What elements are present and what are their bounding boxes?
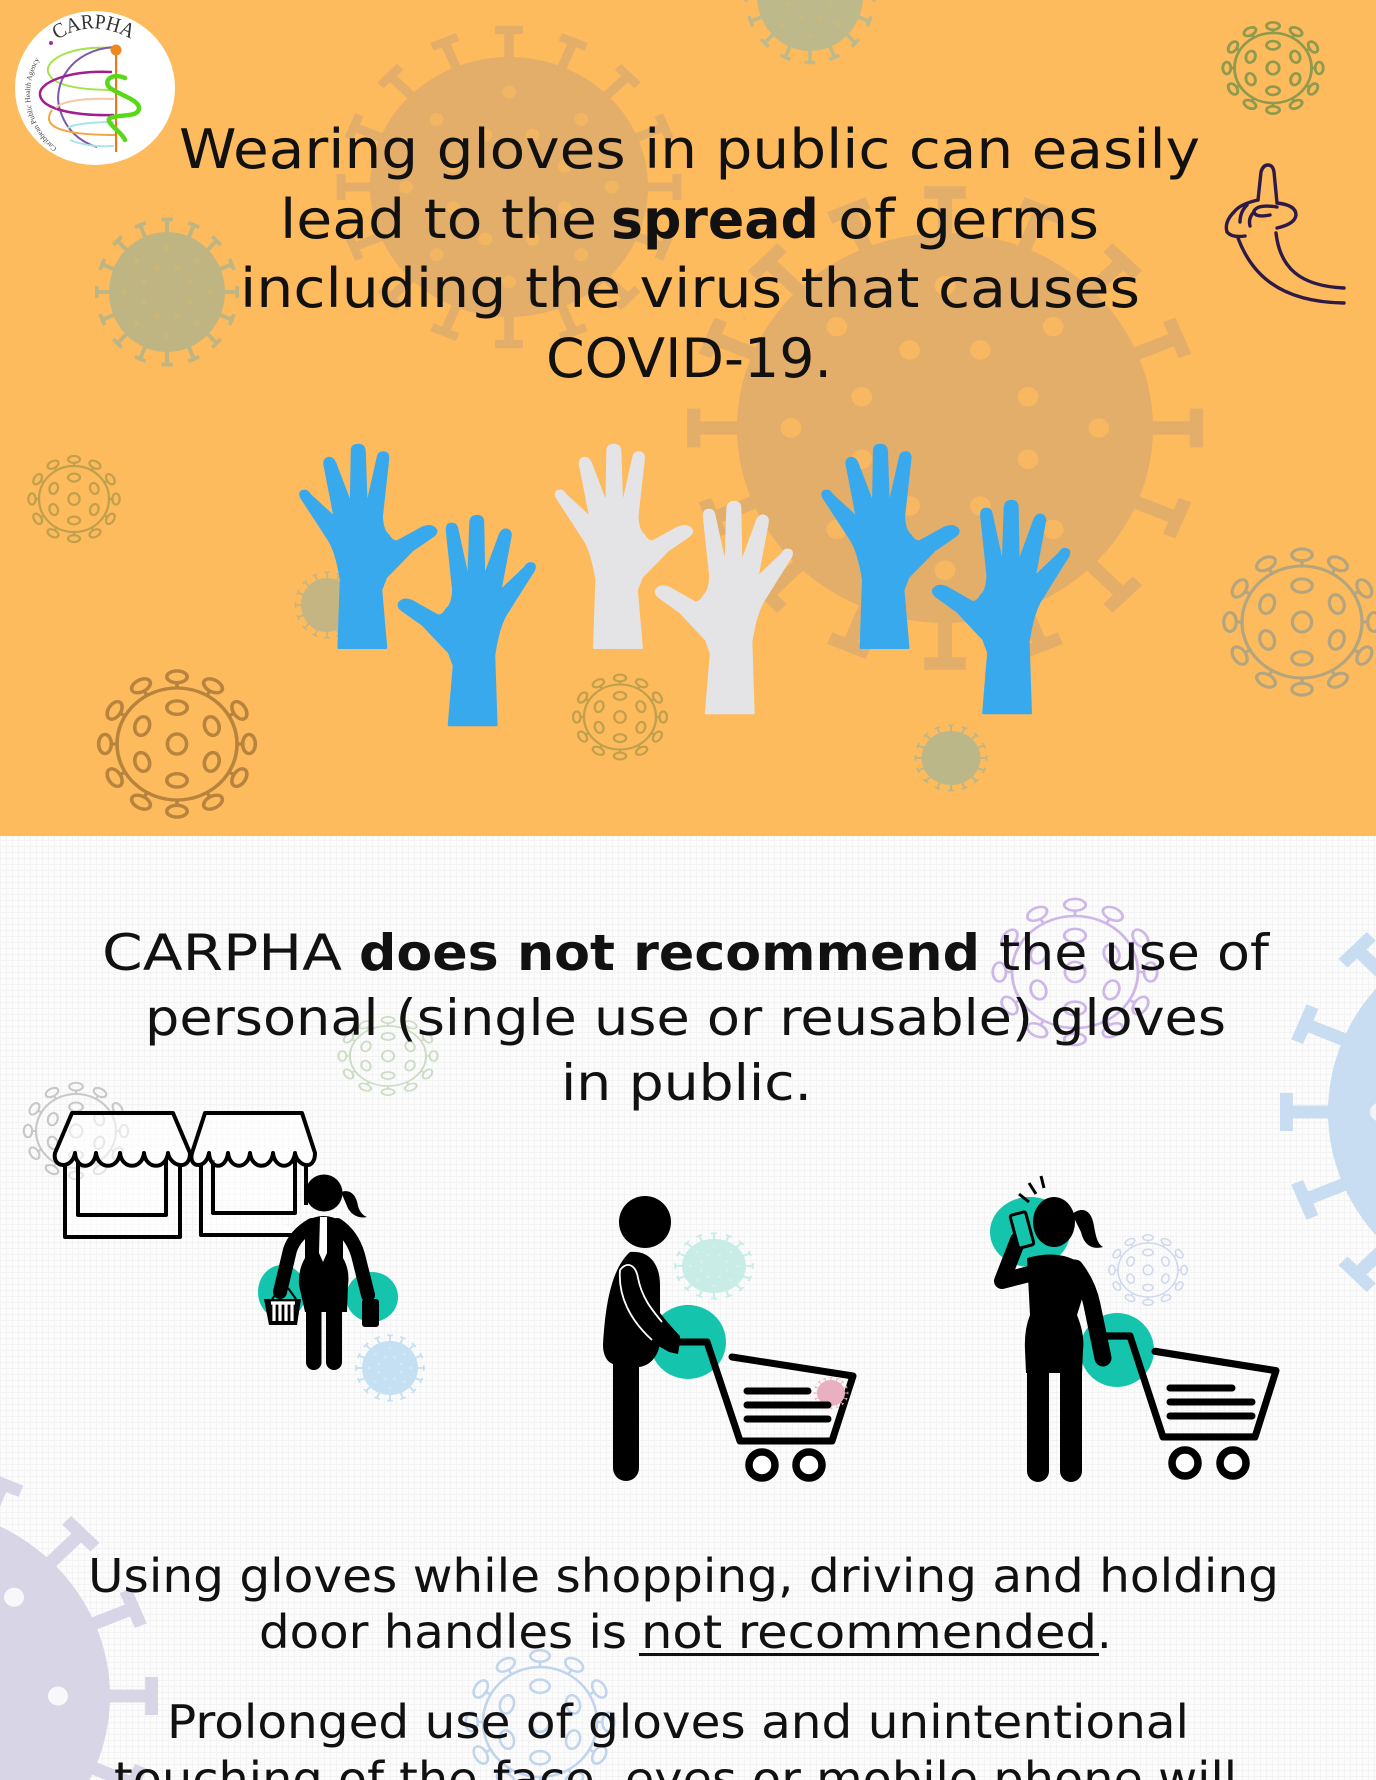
icon: large lavender virus bottom left — [0, 1460, 158, 1780]
text: using gloves not recommended — [88, 1549, 1279, 1659]
text: CARPHA recommendation: personal (single use or reusable) gloves — [145, 989, 1226, 1047]
heading: wearing gloves: of germs — [838, 188, 1099, 251]
heading: wearing gloves: Wearing gloves in public can easily — [179, 118, 1200, 181]
icon: large tan virus centre right — [687, 186, 1203, 670]
heading: wearing gloves: spread — [611, 188, 819, 251]
icon: outline grey virus — [24, 1083, 128, 1179]
heading: wearing gloves: COVID-19. — [546, 327, 832, 390]
illustration: raised gloved hands — [300, 445, 1069, 725]
icon: woman with basket and bag — [258, 1174, 398, 1370]
icon: sage virus bottom — [914, 725, 988, 791]
text: using gloves not recommended: Using gloves while shopping, driving and holding — [88, 1549, 1279, 1603]
icon: man with shopping cart — [603, 1196, 853, 1481]
icon: outline periwinkle virus — [1109, 1235, 1187, 1305]
icon: large blue virus right — [1280, 876, 1376, 1348]
icon: sage virus behind hand — [295, 572, 359, 638]
icon: white glove 2 — [656, 502, 792, 713]
icon: outline sage virus — [338, 1017, 438, 1095]
icon: sage virus top — [744, 0, 876, 64]
icon: CARPHA logo — [15, 11, 175, 165]
icon: outline blue virus — [466, 1650, 614, 1780]
icon: blue glove 4 — [933, 501, 1069, 713]
icon: pointing hand — [1226, 165, 1344, 303]
icon: outline virus top right — [1223, 22, 1323, 114]
text: CARPHA recommendation: the use of — [999, 924, 1270, 982]
icon: outline virus right — [1224, 549, 1376, 695]
icon: outline lavender virus — [993, 899, 1157, 1045]
icon: shops — [55, 1113, 315, 1237]
text: CARPHA recommendation — [102, 924, 1270, 1112]
icon: CARPHA logo: CARPHA — [53, 14, 132, 39]
heading: wearing gloves: lead to the — [280, 188, 597, 251]
text: CARPHA recommendation: CARPHA — [102, 924, 342, 982]
icon: white glove 1 — [556, 445, 692, 648]
text: using gloves not recommended: not recommended — [641, 1605, 1097, 1659]
text: prolonged use of gloves — [114, 1695, 1237, 1780]
icon: blue glove 2 — [399, 516, 535, 725]
icon: large tan virus behind heading — [337, 26, 681, 348]
text: using gloves not recommended: door handles is — [259, 1605, 627, 1659]
text: CARPHA recommendation: does not recommend — [359, 924, 980, 982]
icon: pink virus in cart — [814, 1377, 848, 1409]
heading: wearing gloves — [179, 118, 1200, 390]
icon: pale blue virus — [355, 1335, 425, 1401]
icon: blue glove 1 — [300, 445, 436, 648]
icon: outline virus bottom left — [99, 671, 255, 817]
icon: CARPHA logo: Caribbean Public Health Agency — [24, 58, 56, 151]
text: prolonged use of gloves: Prolonged use of gloves and unintentional — [167, 1695, 1189, 1749]
panel: orange header — [0, 0, 1376, 836]
icon: sage virus left — [95, 218, 239, 366]
icon: outline virus centre bottom — [573, 675, 667, 759]
text: CARPHA recommendation: in public. — [561, 1054, 812, 1112]
icon: woman on phone with shopping cart — [990, 1176, 1276, 1482]
panel: white lower section — [0, 836, 1376, 1780]
heading: wearing gloves: including the virus that causes — [240, 257, 1140, 320]
icon: blue glove 3 — [823, 445, 958, 648]
icon: outline virus left — [28, 456, 120, 542]
text: using gloves not recommended: . — [1097, 1605, 1112, 1659]
icon: mint virus — [674, 1233, 754, 1299]
